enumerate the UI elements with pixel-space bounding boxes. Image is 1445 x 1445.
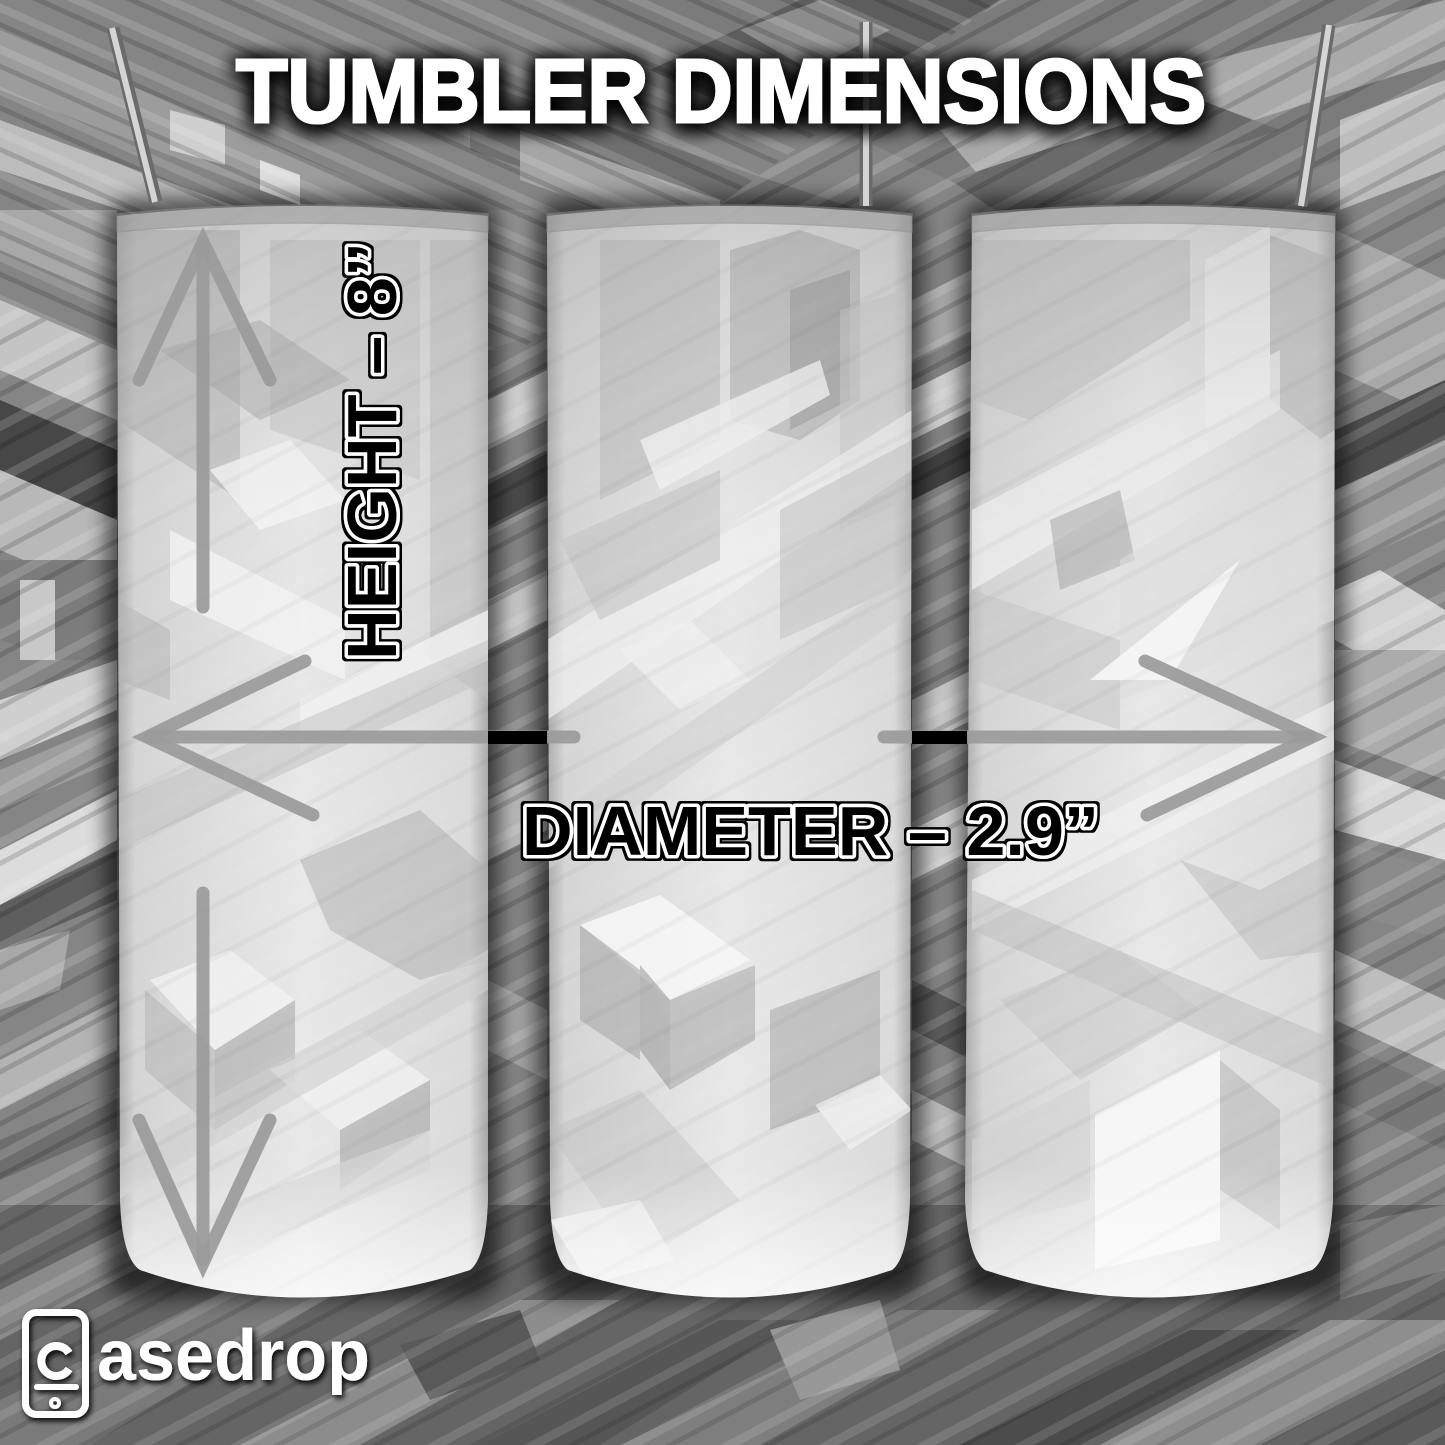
height label: HEIGHT – 8” xyxy=(333,242,411,660)
straw: left tumbler xyxy=(112,28,156,202)
arrow: diameter left xyxy=(147,661,574,815)
tumbler: right xyxy=(965,200,1335,1320)
casedrop logo xyxy=(26,1312,370,1414)
straw: right tumbler xyxy=(1301,25,1329,206)
wordmark: asedrop xyxy=(97,1316,370,1396)
black diameter line segments between tumblers xyxy=(488,731,967,744)
tumbler shadows xyxy=(106,198,1346,1298)
tumbler pattern: middle xyxy=(547,200,912,1320)
background: floor planks xyxy=(0,1205,1445,1445)
arrow: height up xyxy=(139,242,270,607)
straw: middle tumbler xyxy=(860,22,872,206)
arrow: height down xyxy=(139,893,270,1263)
lid: left xyxy=(117,205,488,232)
tumbler: middle xyxy=(547,200,912,1320)
tumbler: left xyxy=(117,200,488,1320)
title: TUMBLER DIMENSIONS xyxy=(236,42,1206,142)
lid: middle xyxy=(547,205,912,232)
tumbler pattern: left xyxy=(117,200,488,1320)
icon: phone xyxy=(26,1312,86,1414)
tumbler pattern: right xyxy=(965,200,1335,1320)
diameter label: DIAMETER – 2.9” xyxy=(522,792,1099,870)
lid: right xyxy=(972,205,1335,232)
arrow: diameter right xyxy=(884,661,1312,815)
straws xyxy=(112,22,1329,206)
